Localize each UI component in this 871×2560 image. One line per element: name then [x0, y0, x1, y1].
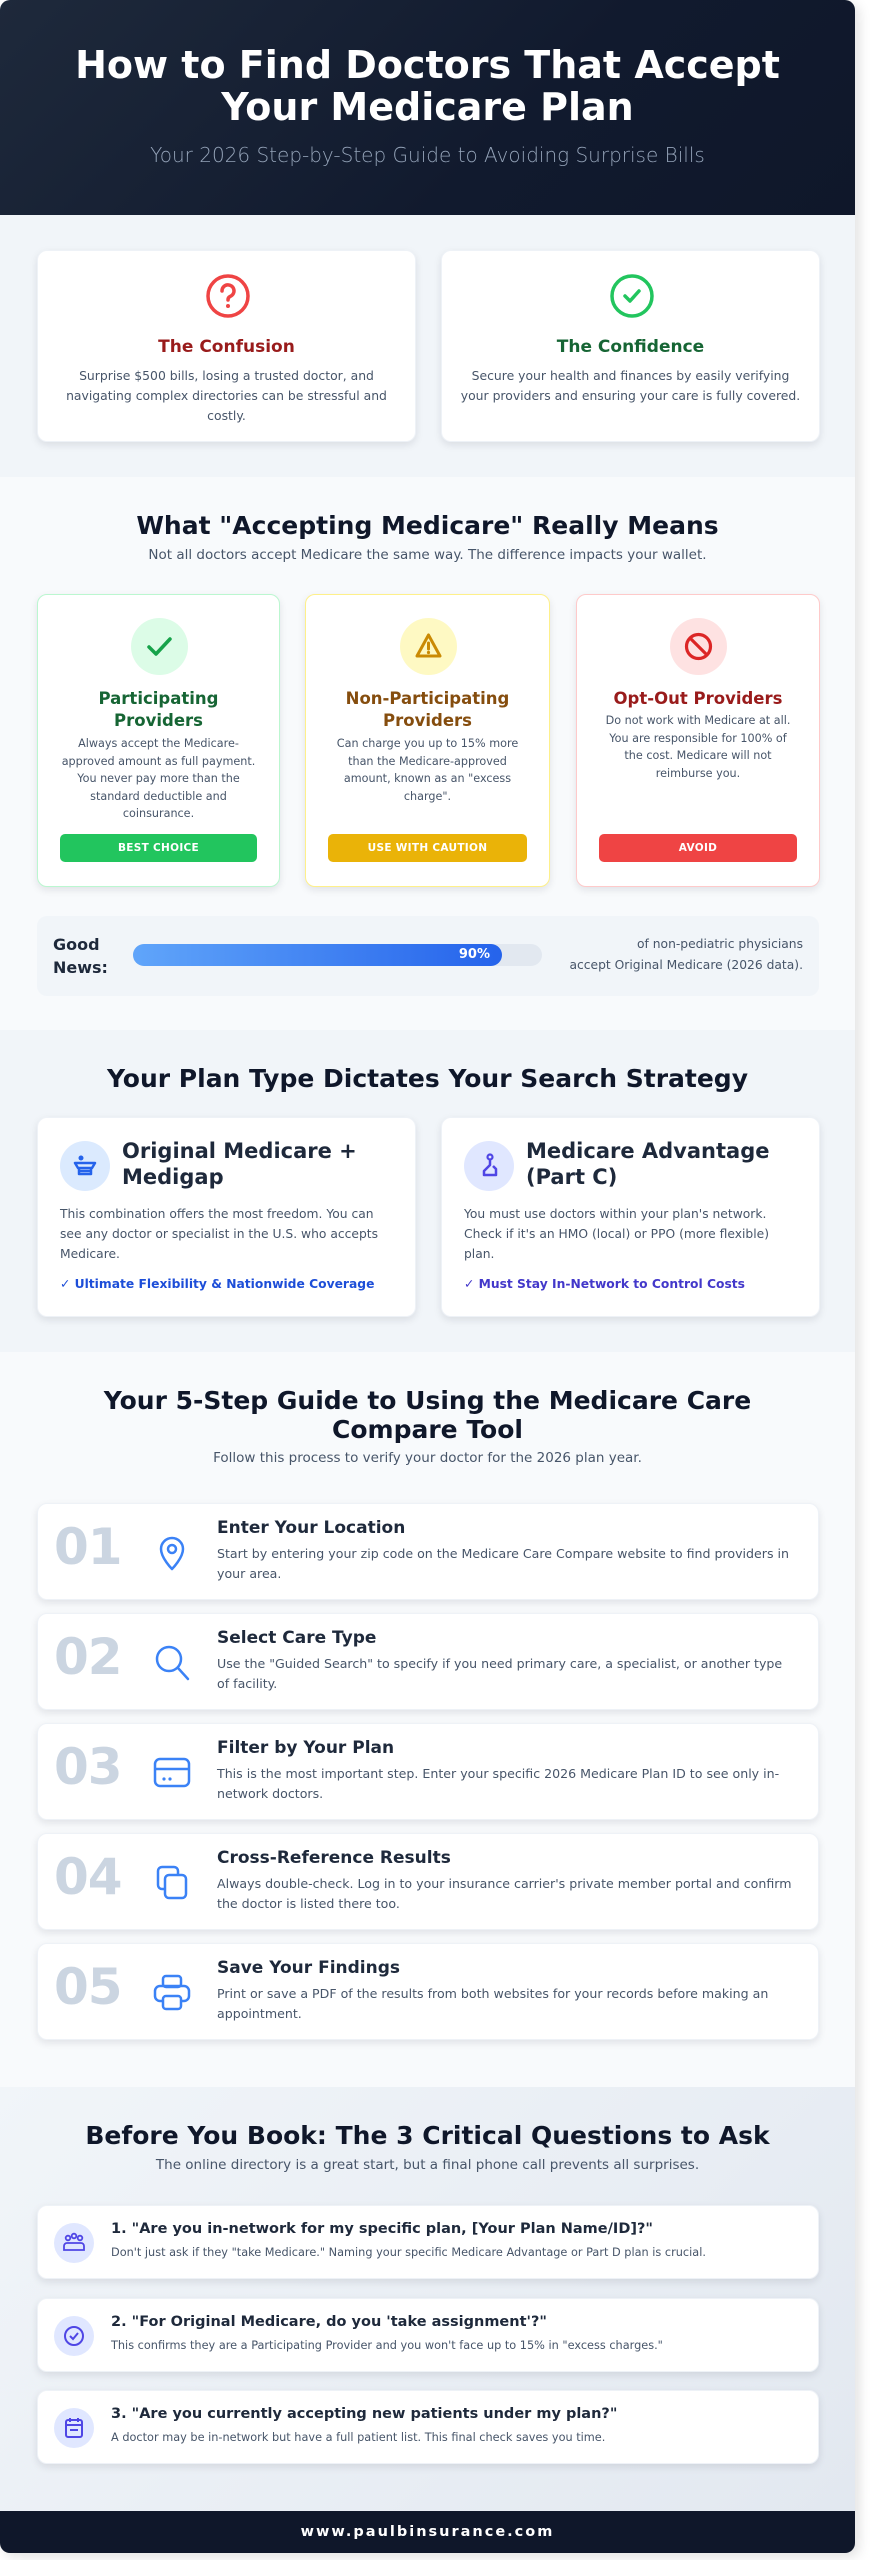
- badge: AVOID: [679, 842, 717, 854]
- title: [99, 689, 218, 730]
- icon: question: [206, 274, 250, 318]
- step 3: Filter by Your Plan: [217, 1738, 394, 1758]
- icon: printer: [154, 1974, 190, 2010]
- bar: [133, 944, 542, 966]
- card: original medicare: [37, 1117, 416, 1317]
- badge: [328, 834, 527, 862]
- icon: pin: [160, 1536, 184, 1570]
- section: accepting medicare: [0, 477, 855, 1030]
- tagline: ✓ Ultimate Flexibility & Nationwide Coverage: [60, 1277, 374, 1291]
- step 5: 05: [54, 1958, 122, 2016]
- card: participating: [37, 594, 280, 887]
- step 3: 03: [54, 1738, 122, 1796]
- question 1: 1. "Are you in-network for my specific plan, [Your Plan Name/ID]?": [111, 2221, 653, 2237]
- step 3: [37, 1723, 819, 1820]
- icon: check: [610, 274, 654, 318]
- label: [53, 935, 108, 977]
- step 4: 04: [54, 1848, 122, 1906]
- step 1: 01: [54, 1518, 122, 1576]
- question 2: [37, 2298, 819, 2372]
- icon: [131, 618, 188, 675]
- title: Providers: [114, 711, 203, 730]
- badge: [599, 834, 797, 862]
- heading: What "Accepting Medicare" Really Means: [136, 511, 719, 540]
- footer: [0, 2511, 855, 2553]
- question 2: This confirms they are a Participating Provider and you won't face up to 15% in "excess charges.": [111, 2339, 663, 2352]
- subheading: Follow this process to verify your doctor for the 2026 plan year.: [213, 1450, 642, 1466]
- step 1: Enter Your Location: [217, 1518, 405, 1538]
- step 1: Start by entering your zip code on the Medicare Care Compare website to find providers in your area.: [217, 1546, 789, 1581]
- section: questions: [0, 2087, 855, 2511]
- card: medicare advantage: [441, 1117, 820, 1317]
- question 3: [37, 2390, 819, 2464]
- step 1: [37, 1503, 819, 1600]
- text: You must use doctors within your plan's network. Check if it's an HMO (local) or PPO (more flexible) plan.: [464, 1207, 769, 1261]
- title: Opt-Out Providers: [614, 689, 782, 708]
- icon: [670, 618, 727, 675]
- header: [0, 0, 855, 215]
- section: confusion vs confidence: [0, 215, 855, 477]
- card: non-participating: [305, 594, 550, 887]
- step 5: Save Your Findings: [217, 1958, 400, 1978]
- icon: [400, 618, 457, 675]
- card: confusion: [37, 250, 416, 442]
- title: Participating: [99, 689, 218, 708]
- icon: copy: [156, 1866, 188, 1900]
- bar: 90%: [459, 947, 490, 962]
- step 4: Cross-Reference Results: [217, 1848, 451, 1868]
- title: [75, 43, 780, 129]
- title: [526, 1139, 769, 1189]
- text: Secure your health and finances by easily verifying your providers and ensuring your care is fully covered.: [461, 368, 800, 403]
- subheading: Not all doctors accept Medicare the same way. The difference impacts your wallet.: [148, 547, 707, 563]
- step 2: Select Care Type: [217, 1628, 376, 1648]
- title: Medicare Advantage: [526, 1139, 769, 1163]
- heading: Compare Tool: [332, 1415, 523, 1444]
- label: News:: [53, 958, 108, 977]
- title: (Part C): [526, 1165, 617, 1189]
- step 3: This is the most important step. Enter your specific 2026 Medicare Plan ID to see only in-network doctors.: [217, 1766, 779, 1801]
- icon: [464, 1141, 514, 1191]
- icon: [60, 1141, 110, 1191]
- step 5: [37, 1943, 819, 2040]
- icon: people: [54, 2223, 94, 2263]
- footer: www.paulbinsurance.com: [301, 2524, 554, 2540]
- step 4: Always double-check. Log in to your insurance carrier's private member portal and confirm the doctor is listed there too.: [217, 1876, 791, 1911]
- question 3: A doctor may be in-network but have a full patient list. This final check saves you time.: [111, 2431, 605, 2444]
- subheading: The online directory is a great start, but a final phone call prevents all surprises.: [156, 2157, 699, 2173]
- card: confidence: [441, 250, 820, 442]
- question 1: Don't just ask if they "take Medicare." Naming your specific Medicare Advantage or Part D plan is crucial.: [111, 2246, 706, 2259]
- title: [122, 1139, 357, 1189]
- tagline: ✓ Must Stay In-Network to Control Costs: [464, 1277, 745, 1291]
- question 3: 3. "Are you currently accepting new patients under my plan?": [111, 2406, 617, 2422]
- step 2: Use the "Guided Search" to specify if you need primary care, a specialist, or another type of facility.: [217, 1656, 782, 1691]
- caption: [569, 937, 803, 972]
- title: Providers: [383, 711, 472, 730]
- title: [346, 689, 509, 730]
- text: This combination offers the most freedom. You can see any doctor or specialist in the U.S. who accepts Medicare.: [60, 1207, 378, 1261]
- icon: calendar: [54, 2408, 94, 2448]
- caption: of non-pediatric physicians: [637, 937, 803, 951]
- caption: accept Original Medicare (2026 data).: [569, 958, 803, 972]
- icon: card: [154, 1758, 190, 1788]
- text: Surprise $500 bills, losing a trusted doctor, and navigating complex directories can be stressful and costly.: [66, 368, 387, 423]
- icon: search: [156, 1646, 190, 1680]
- title: How to Find Doctors That Accept: [75, 43, 780, 87]
- question 2: 2. "For Original Medicare, do you 'take assignment'?": [111, 2314, 547, 2330]
- title: Medigap: [122, 1165, 224, 1189]
- heading: The Confusion: [158, 337, 295, 357]
- text: Do not work with Medicare at all. You are responsible for 100% of the cost. Medicare will not reimburse you.: [606, 714, 790, 780]
- text: Always accept the Medicare-approved amount as full payment. You never pay more than the standard deductible and coinsurance.: [62, 737, 255, 820]
- icon: check: [54, 2316, 94, 2356]
- badge: USE WITH CAUTION: [368, 842, 487, 854]
- heading: [104, 1386, 751, 1444]
- subtitle: Your 2026 Step-by-Step Guide to Avoiding Surprise Bills: [150, 143, 705, 167]
- card: opt-out: [576, 594, 820, 887]
- heading: The Confidence: [557, 337, 704, 357]
- step 5: Print or save a PDF of the results from both websites for your records before making an appointment.: [217, 1986, 768, 2021]
- step 2: [37, 1613, 819, 1710]
- heading: Before You Book: The 3 Critical Questions to Ask: [85, 2121, 770, 2150]
- question 1: [37, 2205, 819, 2279]
- title: Original Medicare +: [122, 1139, 357, 1163]
- badge: BEST CHOICE: [118, 842, 199, 854]
- text: Can charge you up to 15% more than the Medicare-approved amount, known as an "excess charge".: [337, 737, 518, 802]
- step 2: 02: [54, 1628, 122, 1686]
- heading: Your 5-Step Guide to Using the Medicare Care: [104, 1386, 751, 1415]
- step 4: [37, 1833, 819, 1930]
- section: 5 steps: [0, 1352, 855, 2087]
- heading: Your Plan Type Dictates Your Search Strategy: [107, 1064, 748, 1093]
- badge: [60, 834, 257, 862]
- title: Your Medicare Plan: [221, 85, 634, 129]
- label: Good: [53, 935, 100, 954]
- title: Non-Participating: [346, 689, 509, 708]
- section: plan type: [0, 1030, 855, 1352]
- good news stat bar: [37, 916, 819, 996]
